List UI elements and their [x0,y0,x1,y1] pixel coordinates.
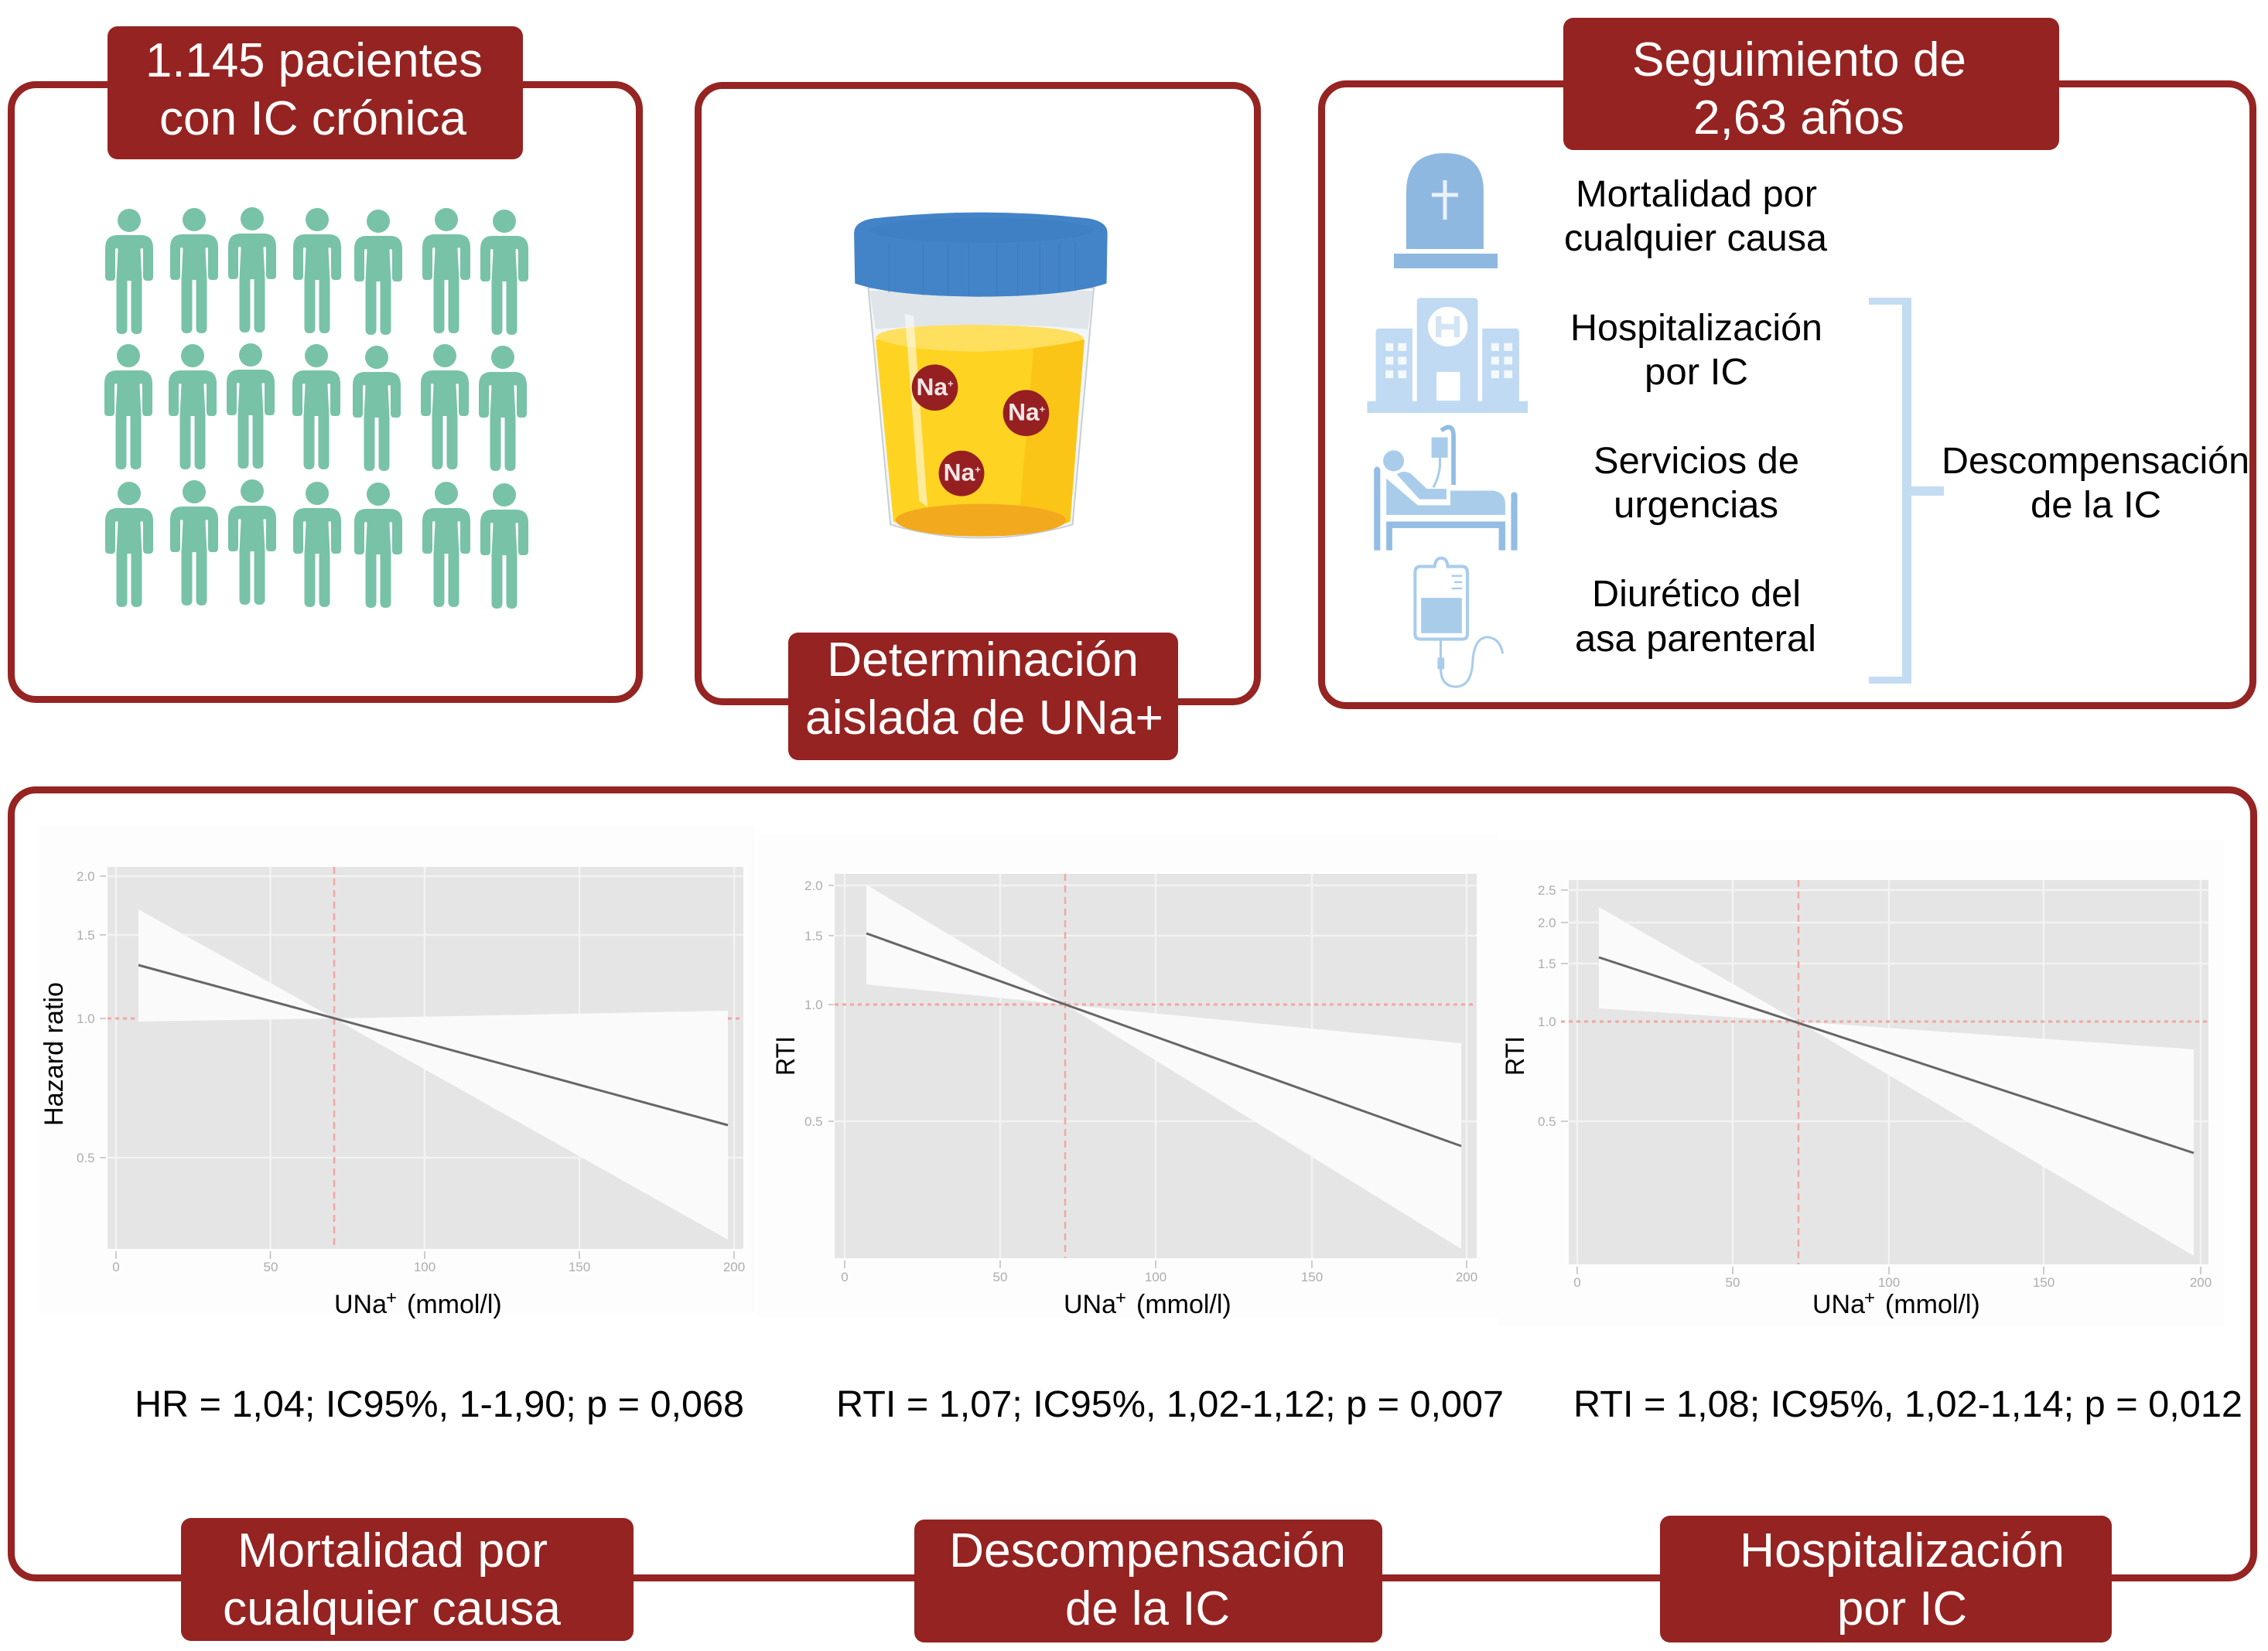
panel: follow-up [1321,18,2253,705]
chart: decompensation: (mmol/l) [1136,1290,1231,1319]
panel: patients [11,26,639,699]
chart: hospitalization: 50 [1726,1275,1740,1290]
heading: decompensation: Descompensación [949,1524,1346,1578]
heading: decompensation [914,1520,1382,1642]
heading: patients: con IC crónica [159,92,467,145]
chart: decompensation: 100 [1145,1270,1166,1284]
icon: patient in bed [1374,427,1518,551]
heading: hospitalization [1660,1516,2112,1642]
chart: all-cause mortality [39,825,755,1319]
bracket [1869,298,1944,684]
icon: urine cup [854,213,1108,538]
chart: hospitalization: + [1864,1288,1875,1308]
panel: urine sodium [698,85,1258,760]
outcome list: cualquier causa [1564,218,1827,259]
chart: hospitalization: 2.5 [1538,883,1556,898]
chart: hospitalization: 200 [2190,1275,2212,1290]
heading: urine sodium: Determinación [827,633,1139,687]
chart: hospitalization: 150 [2033,1275,2055,1290]
heading: hospitalization: por IC [1837,1582,1967,1636]
outcome list: Hospitalización [1570,308,1822,349]
chart: decompensation: 1.5 [804,929,823,943]
chart: decompensation: 1.0 [804,998,823,1012]
heading: follow-up [1563,18,2059,150]
icon: sodium ions: + [975,463,981,475]
chart: all-cause mortality: 100 [414,1260,435,1274]
chart: decompensation: UNa [1064,1290,1116,1319]
chart: all-cause mortality: 1.5 [77,928,95,943]
heading: urine sodium [788,633,1178,760]
chart: all-cause mortality: (mmol/l) [407,1290,502,1319]
chart: hospitalization [1498,840,2224,1327]
chart: decompensation: 50 [993,1270,1007,1284]
chart: decompensation: 0.5 [804,1114,823,1129]
icon: sodium ions: Na [916,374,948,401]
chart: hospitalization: RTI [1501,1036,1530,1076]
chart: decompensation: RTI [771,1036,801,1076]
heading: urine sodium: aislada de UNa+ [805,691,1163,745]
icon: sodium ions: Na [944,459,975,486]
heading: all-cause mortality [181,1518,634,1641]
chart: hospitalization: UNa [1812,1290,1865,1319]
bracket label [1942,441,2249,526]
chart: all-cause mortality: 200 [723,1260,745,1274]
icon: iv bag [1415,558,1503,687]
statistic: mortality: HR = 1,04; IC95%, 1-1,90; p = 0,068 [135,1384,744,1425]
chart: decompensation: 2.0 [804,878,823,893]
icon: hospital [1367,298,1528,413]
outcome list: Mortalidad por [1576,174,1817,215]
chart: all-cause mortality: 2.0 [77,869,95,884]
heading: hospitalization: Hospitalización [1740,1524,2065,1578]
chart: all-cause mortality: 50 [264,1260,278,1274]
chart: all-cause mortality: 0 [112,1260,120,1274]
bracket label: Descompensación [1942,441,2249,482]
chart: hospitalization: (mmol/l) [1885,1290,1980,1319]
chart: all-cause mortality: UNa [334,1290,387,1319]
chart: all-cause mortality: + [386,1288,397,1308]
outcome list: por IC [1645,352,1748,393]
chart: all-cause mortality: 150 [569,1260,590,1274]
heading: all-cause mortality: cualquier causa [223,1582,562,1636]
chart: decompensation [758,834,1498,1319]
heading: follow-up: 2,63 años [1693,91,1904,145]
outcome list: Diurético del [1592,574,1801,615]
icon: sodium ions: Na [1008,399,1040,426]
chart: hospitalization: 1.0 [1538,1015,1556,1029]
chart: all-cause mortality: 0.5 [77,1151,95,1165]
heading: all-cause mortality: Mortalidad por [237,1524,548,1578]
heading: follow-up: Seguimiento de [1632,33,1966,87]
chart: hospitalization: 100 [1878,1275,1900,1290]
chart: decompensation: 200 [1456,1270,1477,1284]
heading: decompensation: de la IC [1065,1582,1230,1636]
panel: results [11,790,2254,1642]
outcome list [1564,174,1827,660]
bracket label: de la IC [2031,485,2161,526]
chart: decompensation: 0 [841,1270,849,1284]
heading: patients [108,26,523,159]
outcome list: urgencias [1614,485,1778,526]
outcome list: Servicios de [1593,441,1799,482]
chart: hospitalization: 2.0 [1538,916,1556,930]
heading: patients: 1.145 pacientes [145,34,483,87]
chart: all-cause mortality: Hazard ratio [39,982,69,1126]
chart: all-cause mortality: 1.0 [77,1011,95,1026]
chart: decompensation: + [1115,1288,1126,1308]
icon: tombstone [1394,153,1498,268]
icon: sodium ions: + [1040,403,1046,414]
chart: hospitalization: 0.5 [1538,1114,1556,1129]
statistic: decompensation: RTI = 1,07; IC95%, 1,02-1,12; p = 0,007 [836,1384,1504,1425]
icon: sodium ions [912,364,1049,496]
chart: hospitalization: 0 [1573,1275,1581,1290]
statistic: hospitalization: RTI = 1,08; IC95%, 1,02-1,14; p = 0,012 [1573,1384,2242,1425]
outcome list: asa parenteral [1575,619,1816,660]
chart: hospitalization: 1.5 [1538,957,1556,971]
icon: sodium ions: + [948,377,954,389]
icon grid: patient figures [104,207,528,609]
chart: decompensation: 150 [1301,1270,1323,1284]
